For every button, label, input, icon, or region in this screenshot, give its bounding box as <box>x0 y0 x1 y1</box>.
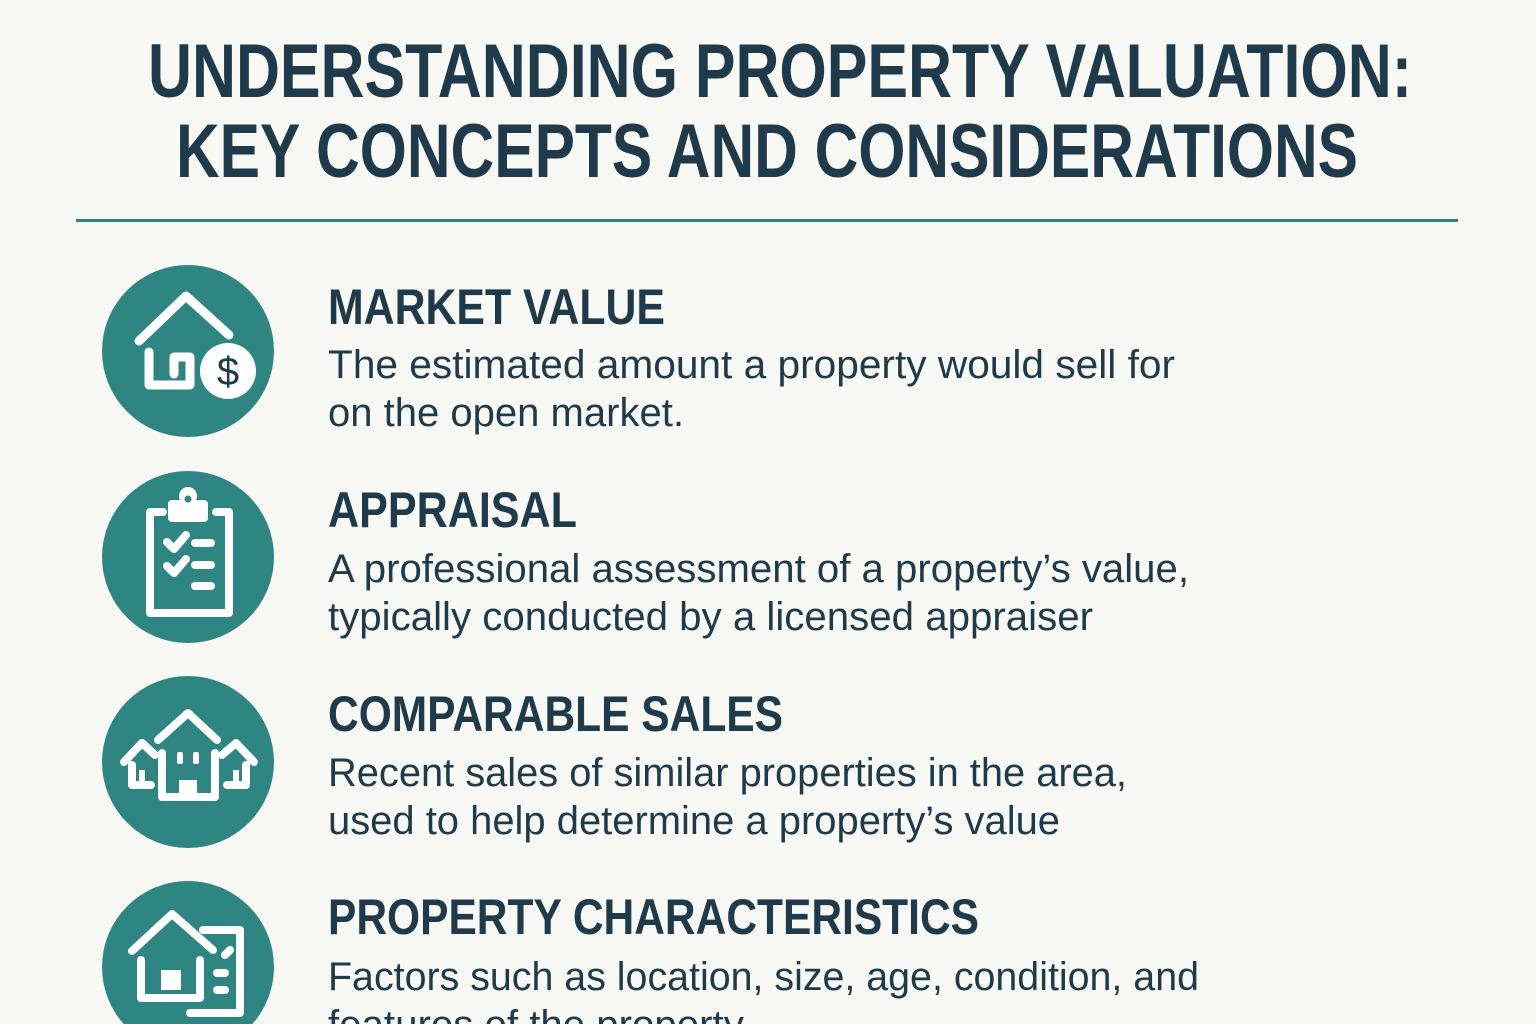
item: appraisal <box>102 471 1189 643</box>
text: market value description <box>328 343 1175 435</box>
icon: clipboard <box>102 471 274 643</box>
text: appraisal description <box>328 547 1189 639</box>
icon: house with document <box>102 881 274 1024</box>
title <box>148 29 1412 194</box>
icon: house with dollar: $ <box>217 350 239 394</box>
heading: property characteristics: PROPERTY CHARACTERISTICS <box>328 889 979 945</box>
heading: comparable sales: COMPARABLE SALES <box>328 686 783 742</box>
icon: three houses <box>102 676 274 848</box>
heading: appraisal: APPRAISAL <box>328 482 577 538</box>
text: property characteristics description <box>328 955 1199 1024</box>
text: appraisal description: A professional assessment of a property’s value, <box>328 547 1189 591</box>
item: property characteristics <box>102 881 1199 1024</box>
text: comparable sales description: Recent sales of similar properties in the area, <box>328 751 1127 795</box>
item: comparable sales <box>102 676 1127 848</box>
text: market value description: The estimated amount a property would sell for <box>328 343 1175 387</box>
icon: house with dollar <box>102 265 274 437</box>
text: appraisal description: typically conducted by a licensed appraiser <box>328 595 1093 639</box>
text: property characteristics description: Factors such as location, size, age, condition, and <box>328 955 1199 999</box>
text: market value description: on the open market. <box>328 391 684 435</box>
heading: market value: MARKET VALUE <box>328 279 665 335</box>
text: comparable sales description <box>328 751 1127 843</box>
text: comparable sales description: used to help determine a property’s value <box>328 799 1060 843</box>
item: market value <box>102 265 1175 437</box>
